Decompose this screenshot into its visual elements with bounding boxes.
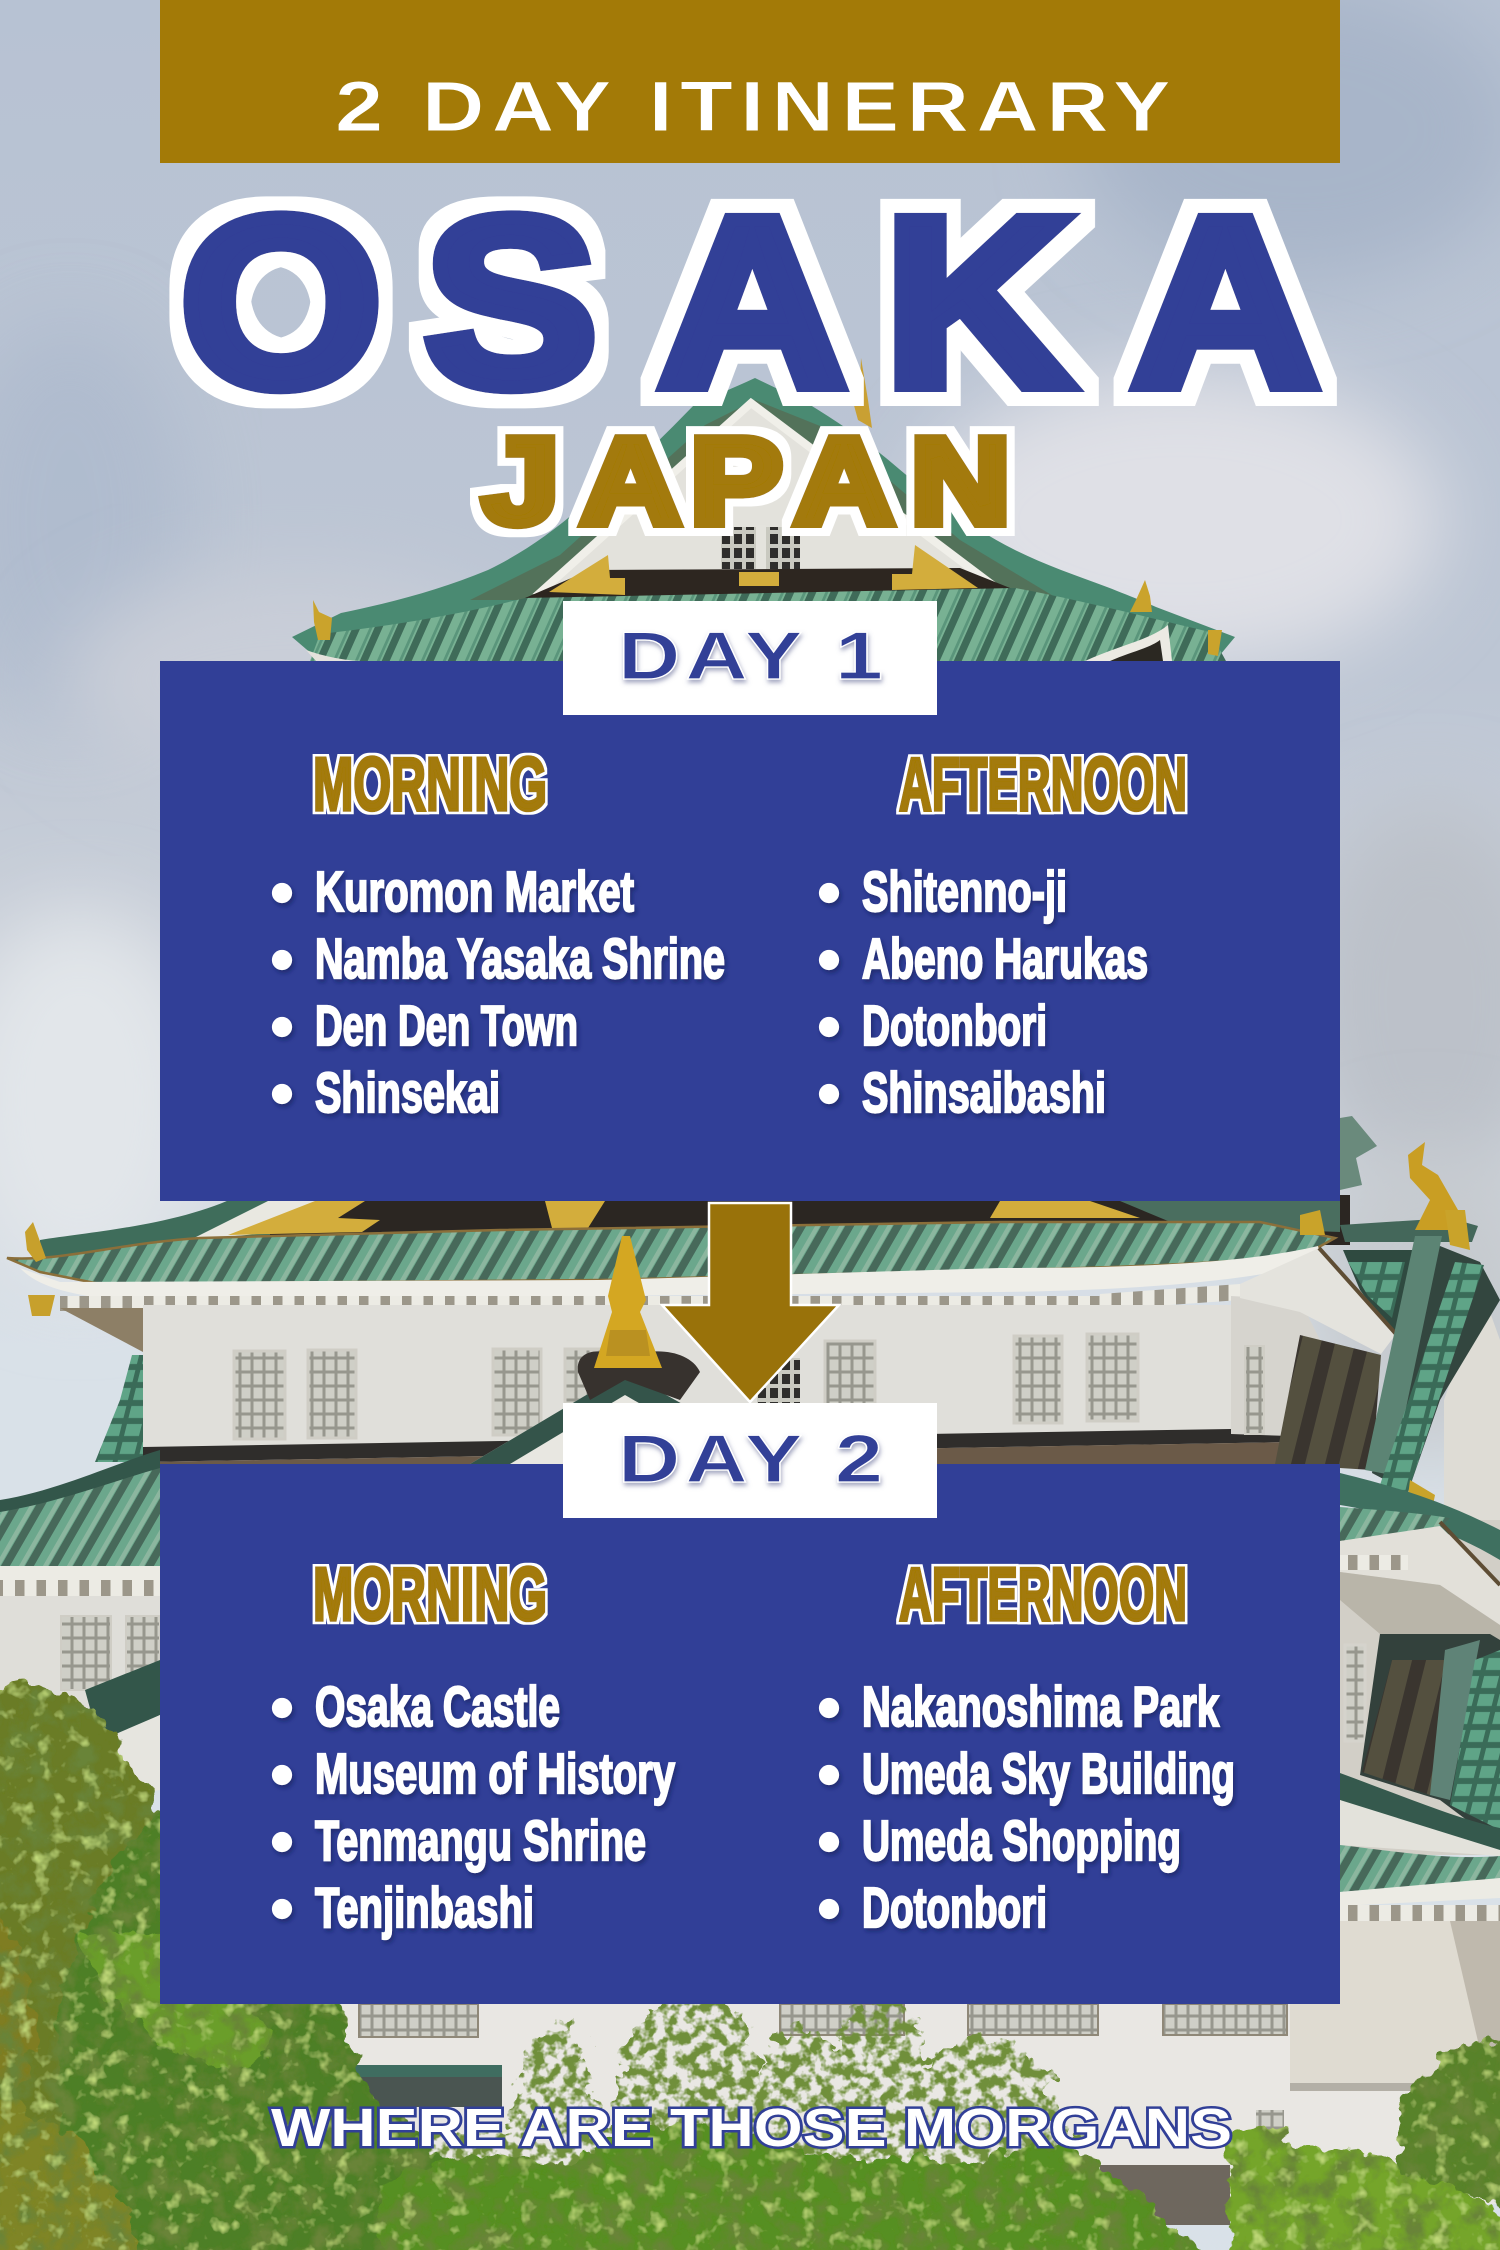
day 1 morning heading: MORNING	[313, 742, 547, 826]
day 1 morning list	[273, 860, 725, 1125]
day 1 afternoon heading: AFTERNOON	[899, 742, 1187, 826]
top roof of the castle	[292, 358, 1235, 661]
main white castle wall with windows	[95, 1305, 1400, 1464]
right side wing: recess, tiled ridges and golden shachi	[1231, 1116, 1500, 1520]
arrow: day 1 to day 2	[662, 1203, 839, 1402]
day 2 morning list: Museum of History	[315, 1742, 675, 1806]
day 2 afternoon list: Nakanoshima Park	[862, 1675, 1219, 1739]
foliage: trees around the base of the castle	[0, 1685, 1500, 2250]
day 2 morning list	[273, 1675, 675, 1940]
day 2 morning list: Tenmangu Shrine	[315, 1809, 646, 1873]
central gable and gold finial	[470, 1236, 790, 1464]
day 1 morning list: Namba Yasaka Shrine	[315, 927, 725, 991]
day 1 afternoon list: Shinsaibashi	[862, 1061, 1106, 1125]
panel: day 2	[160, 1403, 1340, 2004]
day 1 morning list: Shinsekai	[315, 1061, 500, 1125]
banner text: 2 DAY ITINERARY	[335, 68, 1178, 147]
title: OSAKA: OSAKA	[180, 168, 1319, 436]
day 2 morning heading: MORNING	[313, 1552, 547, 1636]
day 2 afternoon list	[820, 1675, 1235, 1940]
thin see-through trees in front of the wall	[420, 1995, 1080, 2230]
day 2 tab: DAY 2	[618, 1421, 888, 1497]
top banner	[160, 0, 1340, 163]
lower building wall and windows	[340, 1921, 1500, 2225]
day 1 morning list: Kuromon Market	[315, 860, 634, 924]
subtitle: JAPAN: JAPAN	[483, 412, 1010, 549]
day 1 afternoon list: Shitenno-ji	[862, 860, 1067, 924]
middle tier: upper band, roof and ornaments	[7, 1195, 1350, 1352]
day 1 morning list: Den Den Town	[315, 994, 578, 1058]
day 2 morning list: Tenjinbashi	[315, 1876, 534, 1940]
day 1 afternoon list	[820, 860, 1148, 1125]
day 1 tab	[563, 601, 937, 715]
day 2 afternoon heading: AFTERNOON	[899, 1552, 1187, 1636]
day 1 afternoon list: Abeno Harukas	[862, 927, 1148, 991]
lower left tier: roof, eave and window	[0, 1450, 160, 1800]
day 2 tab	[563, 1403, 937, 1518]
panel: day 1	[160, 601, 1340, 1201]
day 1 afternoon list: Dotonbori	[862, 994, 1047, 1058]
footer credit: WHERE ARE THOSE MORGANS	[271, 2098, 1232, 2158]
day 2 afternoon list: Umeda Sky Building	[862, 1742, 1235, 1806]
day 2 afternoon list: Dotonbori	[862, 1876, 1047, 1940]
day 2 afternoon list: Umeda Shopping	[862, 1809, 1181, 1873]
lower right tier: recess, roof and eave	[1340, 1473, 1500, 1921]
day 1 tab: DAY 1	[618, 618, 888, 694]
day 2 morning list: Osaka Castle	[315, 1675, 560, 1739]
